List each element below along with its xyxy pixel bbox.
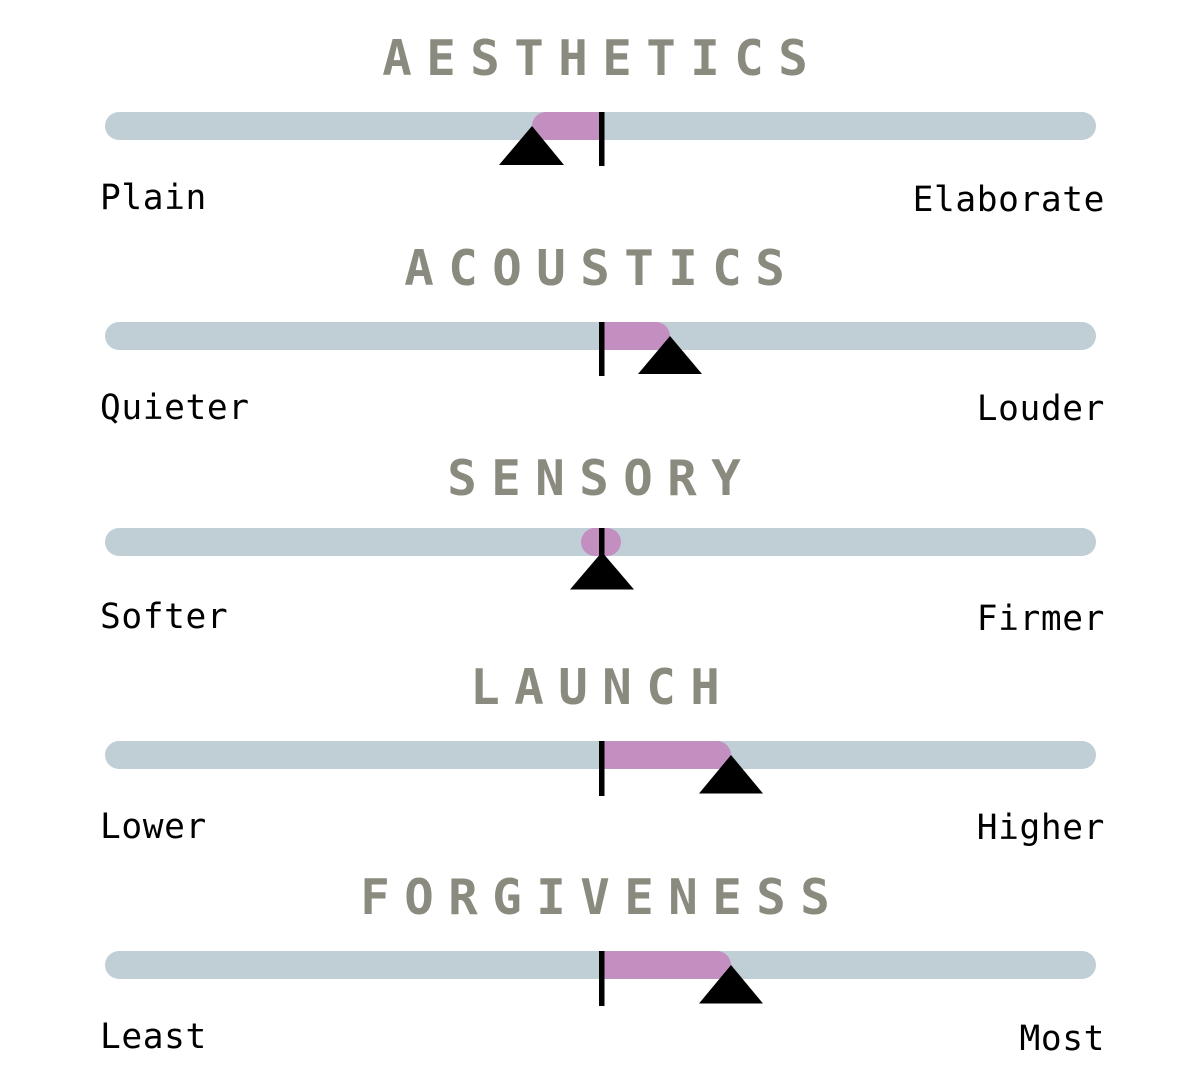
center tick: launch bbox=[599, 741, 604, 796]
right label: Elaborate: Elaborate bbox=[913, 180, 1105, 220]
left label: Least: Least bbox=[100, 1017, 207, 1057]
track: sensory bbox=[105, 528, 1096, 556]
range fill: sensory bbox=[581, 528, 621, 556]
title: sensory: SENSORY bbox=[447, 450, 741, 507]
track: launch bbox=[105, 741, 1096, 769]
title: acoustics: ACOUSTICS bbox=[404, 240, 785, 297]
left label: Lower: Lower bbox=[100, 807, 207, 847]
panel: acoustics scale bbox=[100, 240, 1105, 429]
right label: Louder: Louder bbox=[977, 389, 1105, 429]
track: forgiveness bbox=[105, 951, 1096, 979]
range fill: forgiveness bbox=[602, 951, 731, 979]
center tick: sensory bbox=[599, 528, 604, 558]
range fill: acoustics bbox=[602, 322, 670, 350]
panel: aesthetics scale bbox=[100, 30, 1105, 220]
marker triangle: aesthetics bbox=[499, 126, 564, 165]
left label: Plain: Plain bbox=[100, 178, 207, 218]
track: acoustics bbox=[105, 322, 1096, 350]
title: launch: LAUNCH bbox=[470, 659, 720, 716]
panel: forgiveness scale bbox=[100, 869, 1105, 1059]
left label: Softer: Softer bbox=[100, 597, 228, 637]
range fill: launch bbox=[602, 741, 731, 769]
right label: Most: Most bbox=[1020, 1019, 1105, 1059]
panel: launch scale bbox=[100, 659, 1105, 848]
range fill: aesthetics bbox=[532, 112, 601, 140]
marker triangle: sensory bbox=[570, 552, 634, 590]
track: aesthetics bbox=[105, 112, 1096, 140]
title: forgiveness: FORGIVENESS bbox=[360, 869, 830, 926]
center tick: forgiveness bbox=[599, 951, 604, 1006]
right label: Higher: Higher bbox=[977, 808, 1105, 848]
marker triangle: launch bbox=[699, 755, 763, 794]
left label: Quieter: Quieter bbox=[100, 388, 250, 428]
panel: sensory scale bbox=[100, 450, 1105, 639]
center tick: aesthetics bbox=[599, 112, 604, 166]
center tick: acoustics bbox=[599, 322, 604, 376]
right label: Firmer: Firmer bbox=[977, 599, 1105, 639]
marker triangle: acoustics bbox=[638, 336, 702, 374]
marker triangle: forgiveness bbox=[699, 965, 763, 1004]
title: aesthetics: AESTHETICS bbox=[382, 30, 808, 87]
